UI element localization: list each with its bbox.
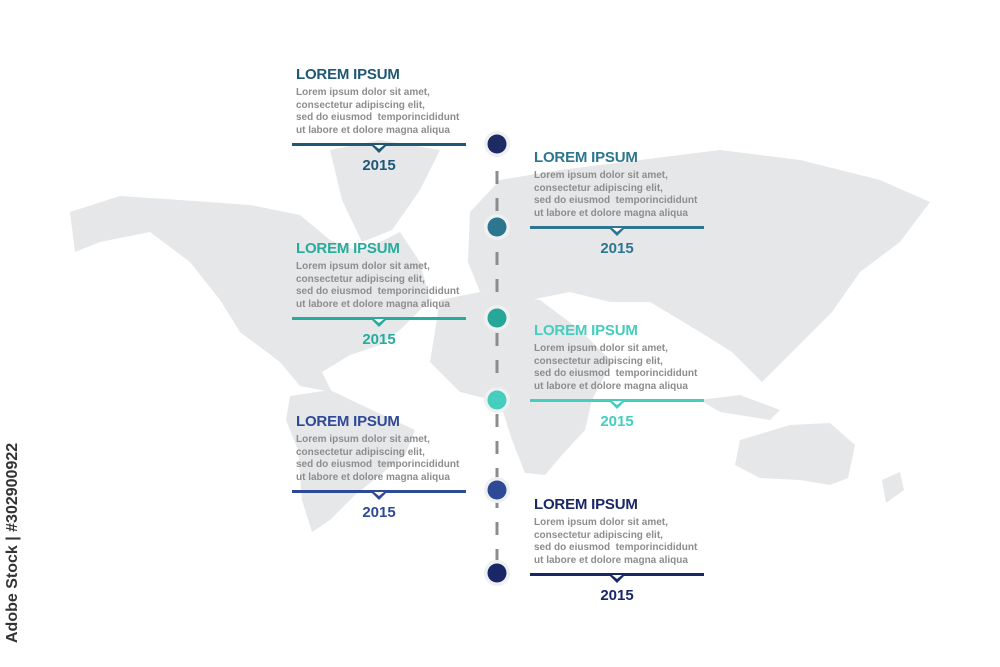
panel 3: sed do eiusmod temporincididunt <box>296 286 459 297</box>
panel 2: Lorem ipsum dolor sit amet, <box>534 170 668 181</box>
panel 1 <box>292 66 466 174</box>
panel 3: Lorem ipsum dolor sit amet, <box>296 261 430 272</box>
panel 6: Lorem ipsum dolor sit amet, <box>534 517 668 528</box>
panel 5: consectetur adipiscing elit, <box>296 447 425 458</box>
panel 6: 2015 <box>600 587 634 604</box>
panel 4: consectetur adipiscing elit, <box>534 356 663 367</box>
panel 4: Lorem ipsum dolor sit amet, <box>534 343 668 354</box>
panel 6: sed do eiusmod temporincididunt <box>534 542 697 553</box>
panel 3: ut labore et dolore magna aliqua <box>296 299 450 310</box>
panel 5: sed do eiusmod temporincididunt <box>296 459 459 470</box>
panel 5: LOREM IPSUM <box>296 413 400 430</box>
panel 6: consectetur adipiscing elit, <box>534 530 663 541</box>
panel 1: consectetur adipiscing elit, <box>296 100 425 111</box>
panel 4: 2015 <box>600 413 634 430</box>
panel 3: 2015 <box>362 331 396 348</box>
panel 4: sed do eiusmod temporincididunt <box>534 368 697 379</box>
panel 6 <box>530 496 704 604</box>
panel 4: ut labore et dolore magna aliqua <box>534 381 688 392</box>
panel 1: ut labore et dolore magna aliqua <box>296 125 450 136</box>
panel 2: ut labore et dolore magna aliqua <box>534 208 688 219</box>
panel 6: LOREM IPSUM <box>534 496 638 513</box>
panel 1: sed do eiusmod temporincididunt <box>296 112 459 123</box>
panel 4 <box>530 322 704 430</box>
panel 1: LOREM IPSUM <box>296 66 400 83</box>
panel 2 <box>530 149 704 257</box>
panel 2: 2015 <box>600 240 634 257</box>
side watermark text: Adobe Stock | #302900922 <box>4 443 21 643</box>
panel 6: ut labore et dolore magna aliqua <box>534 555 688 566</box>
panel 2: consectetur adipiscing elit, <box>534 183 663 194</box>
panel 5 <box>292 413 466 521</box>
panel 3 <box>292 240 466 348</box>
panel 2: sed do eiusmod temporincididunt <box>534 195 697 206</box>
panel 3: consectetur adipiscing elit, <box>296 274 425 285</box>
panel 5: 2015 <box>362 504 396 521</box>
panel 2: LOREM IPSUM <box>534 149 638 166</box>
panel 5: ut labore et dolore magna aliqua <box>296 472 450 483</box>
panel 5: Lorem ipsum dolor sit amet, <box>296 434 430 445</box>
timeline axis <box>484 131 510 586</box>
panel 1: 2015 <box>362 157 396 174</box>
panel 3: LOREM IPSUM <box>296 240 400 257</box>
panel 4: LOREM IPSUM <box>534 322 638 339</box>
panel 1: Lorem ipsum dolor sit amet, <box>296 87 430 98</box>
